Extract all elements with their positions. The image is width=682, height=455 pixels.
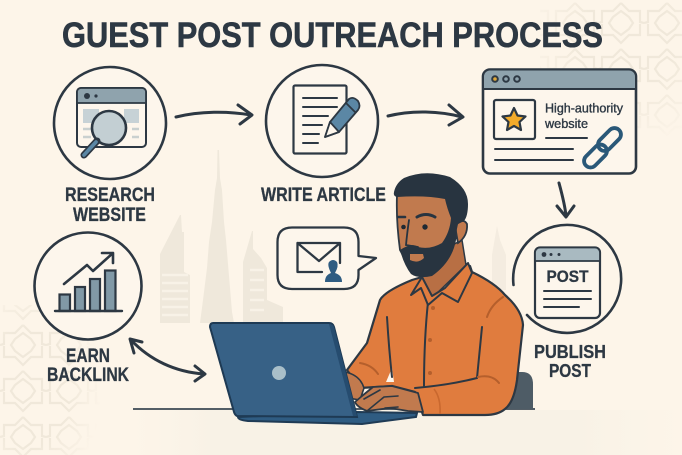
laptop logo (272, 366, 286, 380)
chair (505, 372, 533, 409)
step: earn backlink (34, 232, 142, 386)
label: publish post: POST (549, 360, 592, 381)
label: earn backlink: BACKLINK (47, 365, 129, 386)
laptop (210, 323, 417, 424)
label: publish post: PUBLISH (534, 341, 606, 362)
background pattern: bottom left (0, 306, 83, 455)
person: near hand (355, 386, 423, 412)
icon circle: research (54, 67, 166, 179)
speech bubble: email contact (278, 228, 376, 289)
icon: star (494, 100, 535, 139)
arrow: double-headed backlink (130, 339, 205, 381)
browser title bar (483, 70, 636, 89)
person: facial features (398, 214, 435, 247)
label: research website (65, 185, 155, 226)
arrow: website to publish (557, 183, 574, 217)
icon circle: earn (34, 232, 142, 340)
laptop lid (210, 323, 357, 417)
icon: browser with magnifier (77, 88, 146, 155)
person: face (397, 195, 456, 272)
person: far hand (345, 372, 364, 400)
step: research website (54, 67, 166, 226)
browser window (483, 70, 636, 174)
person: hair (394, 173, 468, 238)
icon: post document (535, 248, 600, 318)
step: write article (261, 65, 386, 206)
icon circle: publish (513, 225, 621, 333)
label: research website: WEBSITE (73, 205, 146, 226)
background pattern: top right (555, 2, 682, 114)
person: collar (411, 263, 472, 305)
person working at laptop (345, 173, 523, 415)
icon: envelope (298, 243, 340, 272)
window controls (492, 76, 520, 82)
text lines (495, 138, 587, 160)
label: publish post (534, 341, 606, 381)
icon: post document: POST (546, 267, 589, 286)
person: ear (455, 221, 467, 243)
desk (133, 409, 682, 455)
person: neck (420, 240, 466, 300)
icon circle: write (266, 65, 378, 177)
icon: rising bar chart (55, 253, 122, 311)
icon: chain link (581, 125, 624, 170)
label: earn backlink (47, 346, 129, 386)
site label: High-authority (545, 102, 624, 116)
person: beard (400, 218, 457, 277)
site label (544, 102, 624, 131)
skyline (160, 150, 506, 323)
icon: document with pencil (294, 86, 360, 154)
title: GUEST POST OUTREACH PROCESS (62, 16, 603, 55)
arrow: write to website (388, 105, 463, 125)
person: shirt details (360, 297, 503, 414)
label: earn backlink: EARN (66, 346, 110, 367)
person: shirt (347, 266, 523, 415)
icon: person (325, 260, 342, 282)
arrow: research to write (176, 105, 252, 124)
panel: high-authority website (483, 70, 636, 174)
bubble (278, 228, 376, 289)
site label: website (544, 117, 588, 131)
label: write article: WRITE ARTICLE (261, 185, 386, 206)
laptop lid edge (329, 324, 357, 416)
step: publish post (513, 225, 621, 381)
laptop base (238, 412, 417, 424)
person: gap between arm and torso (386, 368, 394, 382)
label: research website: RESEARCH (65, 185, 155, 206)
